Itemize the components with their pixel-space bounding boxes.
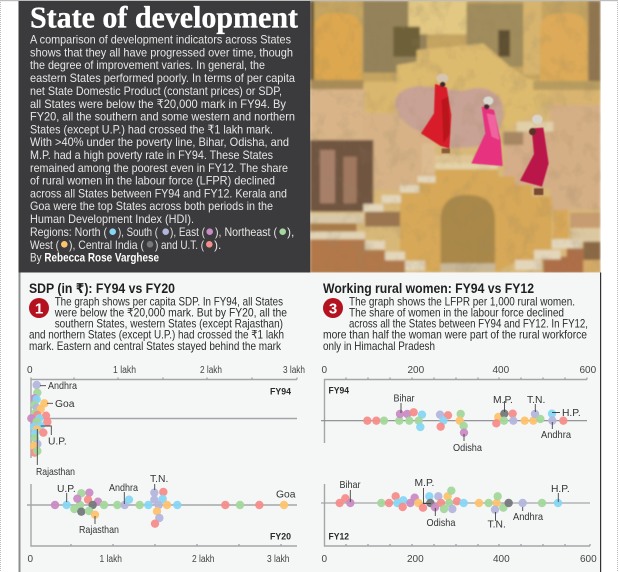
description: SDP: The graph shows per capita SDP. In FY94, all States bbox=[55, 296, 283, 308]
texture: weathered stone mottling bbox=[310, 0, 601, 273]
chart: LFPR FY94: Andhra bbox=[541, 430, 571, 441]
chart: LFPR FY12 bbox=[321, 478, 597, 565]
chart: LFPR FY12: 200 bbox=[407, 554, 424, 565]
intro paragraph: FY20, all the southern and some western and northern bbox=[30, 110, 295, 124]
chart: LFPR FY12: 0 bbox=[322, 554, 328, 565]
chart: LFPR FY94: Odisha bbox=[453, 443, 482, 454]
intro paragraph: Human Development Index (HDI). bbox=[30, 212, 194, 226]
photo: women carrying water on stepwell stairs bbox=[310, 0, 601, 273]
title: State of development bbox=[30, 0, 299, 34]
chart: LFPR FY12: Odisha bbox=[426, 518, 456, 529]
chart: SDP FY94: Andhra bbox=[48, 381, 77, 392]
byline: By Rebecca Rose Varghese bbox=[30, 250, 159, 264]
description: LFPR: only in Himachal Pradesh bbox=[323, 340, 435, 353]
chart: LFPR FY94: M.P. bbox=[493, 395, 513, 406]
chart: SDP FY20: 1 lakh bbox=[100, 554, 122, 565]
description: LFPR bbox=[323, 296, 588, 353]
chart: LFPR FY12: M.P. bbox=[414, 478, 434, 489]
chart: SDP FY20 bbox=[27, 474, 297, 565]
chart: LFPR FY12: H.P. bbox=[551, 484, 570, 495]
chart: LFPR FY12: 400 bbox=[493, 554, 510, 565]
legend: regions: Regions: North ( bbox=[30, 225, 107, 239]
chart: LFPR FY12: Andhra bbox=[513, 512, 543, 523]
legend: regions bbox=[30, 225, 294, 252]
chart: SDP FY94: Goa bbox=[55, 399, 75, 410]
chart: LFPR FY94: FY94 bbox=[328, 386, 350, 396]
description: SDP: mark. Eastern and central States stayed behind the mark bbox=[29, 340, 281, 353]
panel: Working rural women section bbox=[321, 281, 597, 565]
women bbox=[421, 74, 549, 195]
intro paragraph: Goa were the top States across both periods in the bbox=[30, 199, 273, 213]
description: SDP: were below the ₹20,000 mark. But by FY20, all the bbox=[54, 307, 287, 320]
legend: regions: ), South ( bbox=[118, 225, 158, 239]
intro paragraph bbox=[30, 32, 295, 226]
chart: LFPR FY94: 0 bbox=[322, 365, 328, 376]
chart: SDP FY20: FY20 bbox=[270, 532, 291, 542]
chart: SDP FY94: 0 bbox=[27, 365, 33, 376]
badge 1: 1 bbox=[35, 300, 43, 318]
chart: SDP FY20: 3 lakh bbox=[267, 554, 290, 565]
legend: regions: ), bbox=[287, 225, 294, 239]
intro paragraph: across all States between FY94 and FY12. Kerala and bbox=[30, 186, 287, 200]
chart: LFPR FY12: Bihar bbox=[340, 480, 361, 491]
description: SDP: and northern States (except U.P.) had crossed the ₹1 lakh bbox=[29, 329, 284, 342]
chart: SDP FY94: 3 lakh bbox=[283, 365, 305, 376]
panel: intro text bbox=[18, 0, 310, 272]
chart: SDP FY94: FY94 bbox=[270, 386, 292, 398]
description: SDP bbox=[29, 296, 287, 353]
intro paragraph: With >40% under the poverty line, Bihar, Odisha, and bbox=[30, 135, 289, 149]
chart: SDP FY20: Goa bbox=[276, 490, 296, 500]
intro paragraph: all States were below the ₹20,000 mark in FY94. By bbox=[30, 97, 286, 111]
chart: SDP FY20: 0 bbox=[28, 554, 34, 565]
chart: SDP FY94: U.P. bbox=[48, 436, 67, 448]
chart: LFPR FY12: 600 bbox=[580, 554, 597, 565]
badge 3: 3 bbox=[329, 300, 337, 318]
description: LFPR: The share of women in the labour force declined bbox=[349, 307, 564, 320]
legend: regions: ), East ( bbox=[170, 225, 205, 239]
intro paragraph: shows that they all have progressed over time, though bbox=[30, 45, 293, 59]
chart: LFPR FY94 bbox=[321, 365, 597, 454]
chart: LFPR FY94: H.P. bbox=[562, 408, 581, 419]
legend: regions: ). bbox=[214, 238, 221, 252]
legend: regions: ), Northeast ( bbox=[215, 225, 277, 239]
legend: regions: ), Central India ( bbox=[69, 238, 144, 252]
badge 1 bbox=[29, 298, 49, 318]
chart: LFPR FY12: T.N. bbox=[488, 520, 506, 530]
legend: regions: West ( bbox=[30, 238, 59, 252]
intro paragraph: A comparison of development indicators across States bbox=[30, 32, 291, 46]
chart: SDP FY20: Andhra bbox=[109, 483, 138, 494]
panel: SDP section bbox=[27, 281, 305, 565]
intro paragraph: remained among the poorest even in FY12. The share bbox=[30, 161, 288, 175]
chart: SDP FY94: 2 lakh bbox=[200, 365, 222, 376]
chart: SDP FY94: Rajasthan bbox=[36, 467, 75, 478]
intro paragraph: M.P. had a high poverty rate in FY94. These States bbox=[30, 148, 273, 162]
chart: LFPR FY94: 400 bbox=[492, 365, 510, 376]
intro paragraph: the degree of improvement varies. In general, the bbox=[30, 58, 265, 72]
chart: SDP FY94: 1 lakh bbox=[113, 365, 136, 376]
heading: SDP: SDP (in ₹): FY94 vs FY20 bbox=[29, 281, 175, 296]
legend: regions: ) and U.T. ( bbox=[155, 238, 204, 252]
chart: SDP FY20: T.N. bbox=[150, 474, 168, 485]
intro paragraph: eastern States performed poorly. In terms of per capita bbox=[30, 71, 295, 85]
chart: SDP FY20: Rajasthan bbox=[79, 525, 119, 536]
description: LFPR: more than half the woman were part of the rural workforce bbox=[323, 329, 587, 342]
badge 3 bbox=[323, 298, 343, 318]
chart: LFPR FY94: Bihar bbox=[394, 394, 415, 404]
intro paragraph: of rural women in the labour force (LFPR) declined bbox=[30, 174, 275, 188]
chart: LFPR FY94: 600 bbox=[580, 365, 597, 376]
chart: LFPR FY94: 200 bbox=[408, 365, 425, 376]
chart: SDP FY20: 2 lakh bbox=[192, 554, 214, 565]
chart: SDP FY94 bbox=[27, 365, 305, 478]
intro paragraph: States (except U.P.) had crossed the ₹1 lakh mark. bbox=[30, 122, 273, 136]
intro paragraph: net State Domestic Product (constant prices) or SDP, bbox=[30, 84, 282, 98]
chart: LFPR FY94: T.N. bbox=[527, 395, 545, 406]
description: LFPR: The graph shows the LFPR per 1,000 rural women. bbox=[349, 296, 575, 308]
panel: charts background bbox=[18, 272, 601, 572]
chart: LFPR FY12: FY12 bbox=[328, 532, 349, 542]
heading: working rural women: Working rural women: FY94 vs FY12 bbox=[323, 281, 534, 296]
description: SDP: southern States, western States (except Rajasthan) bbox=[55, 318, 283, 331]
chart: SDP FY20: U.P. bbox=[57, 484, 76, 495]
